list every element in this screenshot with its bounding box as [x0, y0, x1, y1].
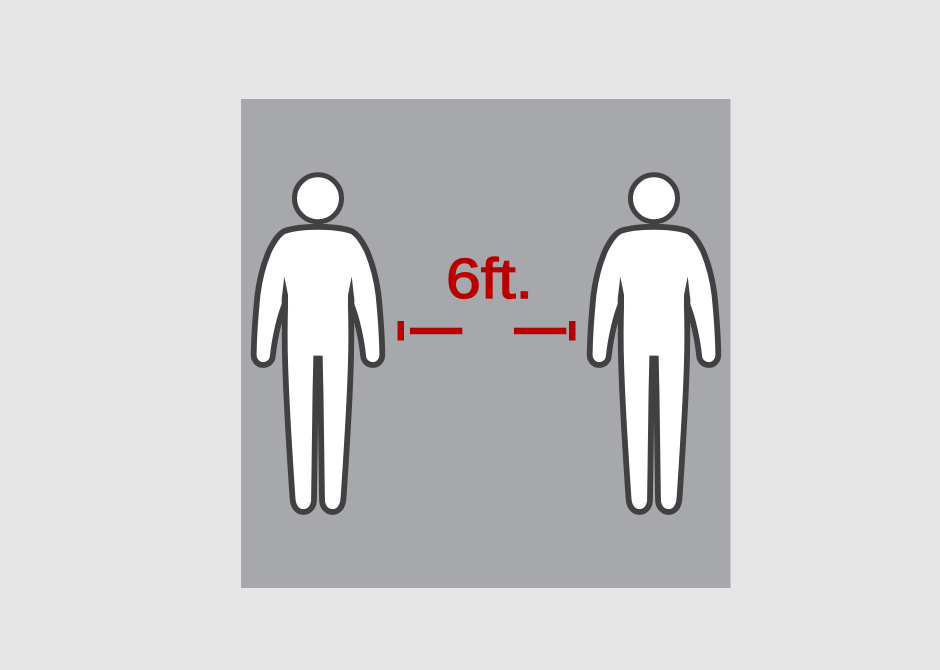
panel: grey square background [241, 99, 730, 588]
arrow: right distance marker [514, 321, 576, 340]
left person armpit wedges [282, 276, 354, 308]
arrow: left distance marker [398, 321, 462, 340]
left person body [254, 227, 382, 512]
icon: right person [590, 175, 718, 512]
right person head [630, 175, 678, 222]
distance label: 6ft. [446, 247, 533, 311]
left person head [294, 175, 342, 222]
right person armpit wedges [618, 276, 690, 308]
icon: left person [254, 175, 382, 512]
right person body [590, 227, 718, 512]
